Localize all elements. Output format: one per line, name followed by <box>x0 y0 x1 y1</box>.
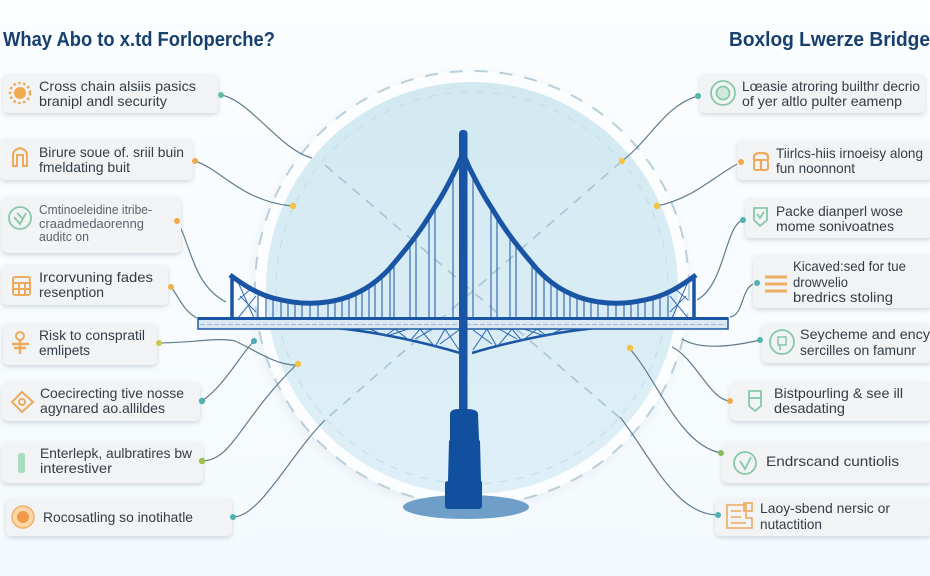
panel: left item 5 <box>3 323 157 365</box>
hangers <box>238 174 688 318</box>
connector dots <box>156 92 763 520</box>
text: interestiver <box>40 460 112 476</box>
panel: left item 2 <box>0 139 193 180</box>
text: Risk to conspratil <box>39 327 145 343</box>
icon: green circle <box>770 330 794 354</box>
icon: diamond <box>12 392 33 412</box>
text: Rocosatling so inotihatle <box>43 509 193 525</box>
panel: left item 4 <box>2 265 168 305</box>
text <box>40 445 193 476</box>
text <box>774 385 903 416</box>
panel: right item 4 <box>753 255 930 308</box>
panel: left item 3 <box>2 197 181 253</box>
bridge illustration <box>198 130 728 519</box>
panel: left item 7 <box>2 442 203 483</box>
text <box>776 145 923 176</box>
panel: right item 1 <box>700 74 925 113</box>
panel: right item 5 <box>762 324 930 363</box>
text: desadating <box>774 400 845 416</box>
text: bredrics stoling <box>793 289 893 305</box>
icon: lock <box>754 153 768 170</box>
text <box>742 78 920 109</box>
tower base <box>445 409 482 509</box>
icon: green circle <box>711 81 735 105</box>
text: craadmedaorenng <box>39 216 144 231</box>
text <box>39 144 184 175</box>
text <box>39 202 152 244</box>
text <box>39 327 145 358</box>
text: auditc on <box>39 229 89 244</box>
panel: left item 1 <box>3 74 218 113</box>
text: branipl andl security <box>39 93 167 109</box>
text: Endrscand cuntiolis <box>766 453 899 469</box>
icon: green circle <box>9 207 31 229</box>
text: Cross chain alsiis pasics <box>39 78 196 94</box>
text: resenption <box>39 284 104 300</box>
deck <box>198 317 728 329</box>
icon: grid <box>13 277 30 295</box>
text <box>760 500 890 532</box>
text: Enterlepk, aulbratires bw <box>40 445 193 461</box>
text: Birure soue of. sriil buin <box>39 144 184 160</box>
ground shadow <box>403 495 529 519</box>
title: left heading: Whay Abo to x.td Forloperche? <box>3 29 275 51</box>
text <box>776 203 903 234</box>
panel: right item 2 <box>737 140 930 180</box>
underdeck truss <box>335 328 597 353</box>
text: mome sonivoatnes <box>776 218 894 234</box>
text: fun noonnont <box>776 160 855 176</box>
text: Laoy-sbend nersic or <box>760 500 890 516</box>
text <box>39 78 196 109</box>
text <box>39 269 153 300</box>
text: Lœasie atroring builthr decrio <box>742 78 920 94</box>
main tower <box>459 130 468 412</box>
connector lines <box>159 95 760 517</box>
icon: green bottle <box>18 453 25 473</box>
panel: left item 6 <box>2 382 200 421</box>
text: Bistpourling & see ill <box>774 385 903 401</box>
text: Seycheme and ency <box>800 326 930 342</box>
text: Packe dianperl wose <box>776 203 903 219</box>
text: of yer altlo pulter eamenp <box>742 93 902 109</box>
icon: green shield <box>754 208 767 226</box>
panel: right item 6 <box>730 382 930 421</box>
text: nutactition <box>760 516 822 532</box>
text: emlipets <box>39 342 90 358</box>
text <box>793 258 906 305</box>
text: Cmtinoeleidine itribe- <box>39 202 152 217</box>
icon: green circle <box>734 452 756 474</box>
text: Coecirecting tive nosse <box>40 385 184 401</box>
panel: right item 8 <box>715 498 930 536</box>
panel: right item 3 <box>745 198 930 238</box>
main cables <box>230 153 696 303</box>
text: sercilles on famunr <box>800 342 916 358</box>
text: Ircorvuning fades <box>39 269 153 285</box>
text: fmeldating buit <box>39 159 130 175</box>
icon: orange list <box>765 277 787 291</box>
panel: left item 8 <box>6 498 232 536</box>
text <box>800 326 930 358</box>
side towers <box>232 275 694 319</box>
text <box>40 385 184 416</box>
icon: orange document <box>727 503 752 528</box>
icon: sun <box>10 83 30 103</box>
text: Tiirlcs-hiis irnoeisy along <box>776 145 923 161</box>
panel: right item 7 <box>722 442 930 483</box>
icon: pin <box>12 332 29 354</box>
text: agynared ao.allildes <box>40 400 165 416</box>
text: Kicaved:sed for tue <box>793 258 906 274</box>
icon: green shield <box>749 391 761 411</box>
text: drowvelio <box>793 274 848 290</box>
icon: orange circle <box>12 506 34 528</box>
icon: arch <box>13 148 27 166</box>
central circle <box>254 71 689 508</box>
